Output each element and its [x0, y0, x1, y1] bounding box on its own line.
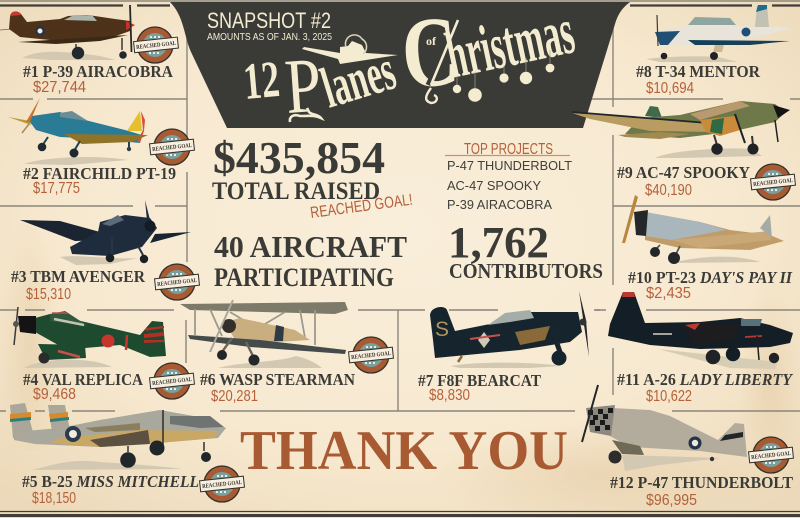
- icon: Bearcat plane: [430, 291, 589, 368]
- icon: TBM plane: [20, 200, 191, 265]
- amount: $40,190: [645, 182, 692, 199]
- panel: TBM Avenger: [11, 200, 199, 303]
- badge: reached goal: REACHED GOAL: [202, 480, 242, 490]
- badge: reached goal: [751, 164, 795, 200]
- aircraft participating stat: [214, 229, 407, 292]
- reached goal note: REACHED GOAL!: [309, 192, 414, 222]
- icon: plane silhouette: [302, 35, 398, 64]
- panel: P-39 Airacobra: [0, 5, 178, 96]
- total raised stat: $435,854: [213, 133, 385, 183]
- amount: $2,435: [646, 285, 691, 302]
- icon: P-39 plane: [0, 5, 135, 60]
- amount: $8,830: [429, 387, 470, 404]
- label: #1 P-39 AIRACOBRA: [23, 62, 173, 81]
- panel: PT-19 Fairchild: [8, 98, 194, 197]
- label: #7 F8F BEARCAT: [418, 371, 541, 390]
- badge: reached goal: REACHED GOAL: [157, 278, 197, 288]
- top projects list: TOP PROJECTS: [464, 141, 553, 158]
- panel: P-47 Thunderbolt: [582, 385, 793, 509]
- icon: P-47 plane: [582, 385, 747, 471]
- label: #8 T-34 MENTOR: [636, 62, 761, 81]
- title: 12 Planes: 12: [241, 51, 282, 111]
- badge: reached goal: [749, 437, 793, 473]
- title: 12 Planes: lanes: [314, 37, 403, 120]
- aircraft participating stat: PARTICIPATING: [214, 263, 394, 292]
- amount: $20,281: [211, 388, 258, 405]
- thank you heading: THANK YOU: [240, 420, 568, 482]
- total raised stat: [212, 133, 414, 222]
- label: #11 A-26 LADY LIBERTY: [617, 370, 794, 389]
- snapshot heading: SNAPSHOT #2: [207, 8, 331, 33]
- icon: PT-19 plane: [8, 98, 148, 165]
- amount: $27,744: [33, 79, 86, 96]
- contributors stat: 1,762: [448, 218, 549, 267]
- icon: Bearcat plane: S: [435, 318, 449, 341]
- amount: $17,775: [33, 180, 80, 197]
- icon: B-25 plane: [10, 403, 226, 470]
- top projects list: AC-47 SPOOKY: [447, 178, 541, 193]
- icon: T-34 plane: [646, 5, 790, 62]
- header banner: [170, 0, 630, 130]
- amount: $15,310: [26, 286, 71, 303]
- badge: reached goal: REACHED GOAL: [751, 451, 791, 461]
- icon: AC-47 plane: [572, 101, 790, 158]
- label: #5 B-25 MISS MITCHELL: [22, 472, 199, 491]
- badge: reached goal: REACHED GOAL: [136, 41, 176, 51]
- badge: reached goal: [155, 264, 199, 300]
- label: #4 VAL REPLICA: [23, 370, 143, 389]
- panel: T-34 Mentor: [636, 5, 790, 97]
- date note: AMOUNTS AS OF JAN. 3, 2025: [207, 31, 332, 43]
- top projects list: P-47 THUNDERBOLT: [447, 158, 572, 173]
- top projects list: P-39 AIRACOBRA: [447, 197, 552, 212]
- label: #12 P-47 THUNDERBOLT: [610, 473, 793, 492]
- panel: B-25 Miss Mitchell: [10, 403, 244, 507]
- badge: reached goal: [134, 27, 178, 63]
- icon: Stearman plane: [180, 300, 348, 368]
- icon: A-26 plane: [608, 292, 793, 369]
- amount: $18,150: [32, 490, 76, 507]
- badge: reached goal: [349, 337, 393, 373]
- title: 12 Planes: P: [282, 41, 324, 130]
- aircraft participating stat: 40 AIRCRAFT: [214, 229, 407, 264]
- panel: Wasp Stearman: [180, 300, 393, 405]
- amount: $10,694: [646, 80, 694, 97]
- title: of Christmas: [397, 0, 580, 110]
- label: #2 FAIRCHILD PT-19: [23, 164, 176, 183]
- amount: $9,468: [33, 386, 76, 403]
- icon: Val plane: [13, 307, 166, 368]
- panel: Val replica: [13, 307, 194, 403]
- contributors stat: CONTRIBUTORS: [449, 259, 603, 283]
- badge: reached goal: [200, 466, 244, 502]
- label: #3 TBM AVENGER: [11, 267, 146, 286]
- amount: $10,622: [646, 388, 692, 405]
- title: of Christmas: of: [426, 34, 437, 48]
- title: 12 Planes: [241, 37, 403, 130]
- ornaments: [453, 50, 554, 102]
- total raised stat: TOTAL RAISED: [212, 176, 380, 205]
- icon: PT-23 plane: [622, 195, 784, 264]
- contributors stat: [448, 218, 603, 283]
- amount: $96,995: [646, 492, 697, 509]
- panel: AC-47 Spooky: [572, 101, 795, 200]
- panel: F8F Bearcat: [418, 291, 589, 404]
- badge: reached goal: REACHED GOAL: [351, 351, 391, 361]
- label: #10 PT-23 DAY'S PAY II: [628, 268, 793, 287]
- panel: PT-23 Day's Pay II: [622, 195, 793, 302]
- badge: reached goal: [150, 129, 194, 165]
- label: #9 AC-47 SPOOKY: [617, 163, 750, 182]
- label: #6 WASP STEARMAN: [200, 370, 355, 389]
- top projects list: [445, 141, 572, 212]
- badge: reached goal: REACHED GOAL: [152, 143, 192, 153]
- badge: reached goal: [150, 363, 194, 399]
- panel: A-26 Lady Liberty: [608, 292, 794, 405]
- badge: reached goal: REACHED GOAL: [152, 377, 192, 387]
